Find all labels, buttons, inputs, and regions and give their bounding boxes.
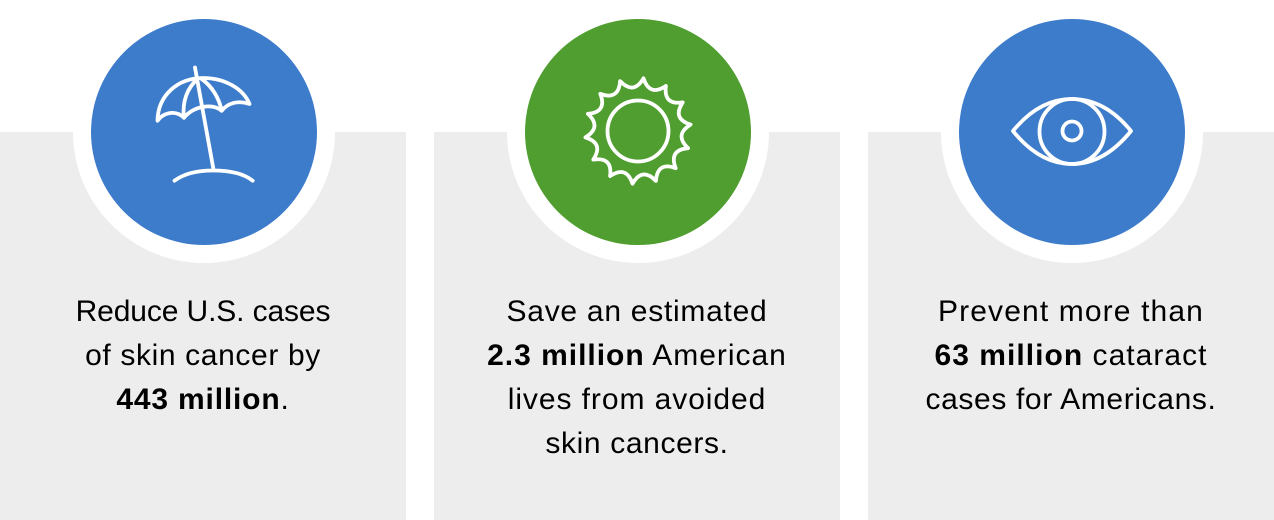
panel: lives saved bbox=[434, 132, 840, 520]
blue circle: left bbox=[91, 19, 317, 245]
white ring: middle bbox=[507, 1, 769, 263]
panel: cataract cases bbox=[868, 132, 1274, 520]
green circle: middle bbox=[525, 19, 751, 245]
white ring: left bbox=[73, 1, 335, 263]
blue circle: right bbox=[959, 19, 1185, 245]
text: skin cancer: 443 million. bbox=[116, 383, 290, 416]
text: skin cancer: of skin cancer by bbox=[85, 339, 321, 372]
text: lives saved: lives from avoided bbox=[508, 383, 766, 416]
white ring: right bbox=[941, 1, 1203, 263]
text: skin cancer: Reduce U.S. cases bbox=[76, 295, 330, 328]
text: lives saved: Save an estimated bbox=[507, 295, 767, 328]
text: cataract: 63 million cataract bbox=[934, 339, 1208, 372]
icon: eye bbox=[1013, 99, 1131, 164]
text: cataract: Prevent more than bbox=[938, 295, 1204, 328]
icon: beach umbrella bbox=[158, 68, 253, 181]
text: cataract bbox=[925, 295, 1217, 416]
text: lives saved bbox=[487, 295, 787, 460]
text: lives saved: skin cancers. bbox=[545, 427, 729, 460]
text: skin cancer bbox=[76, 295, 330, 416]
icon: sun bbox=[585, 78, 691, 184]
text: lives saved: 2.3 million American bbox=[487, 339, 787, 372]
text: cataract: cases for Americans. bbox=[925, 383, 1217, 416]
panel: skin cancer cases bbox=[0, 132, 406, 520]
